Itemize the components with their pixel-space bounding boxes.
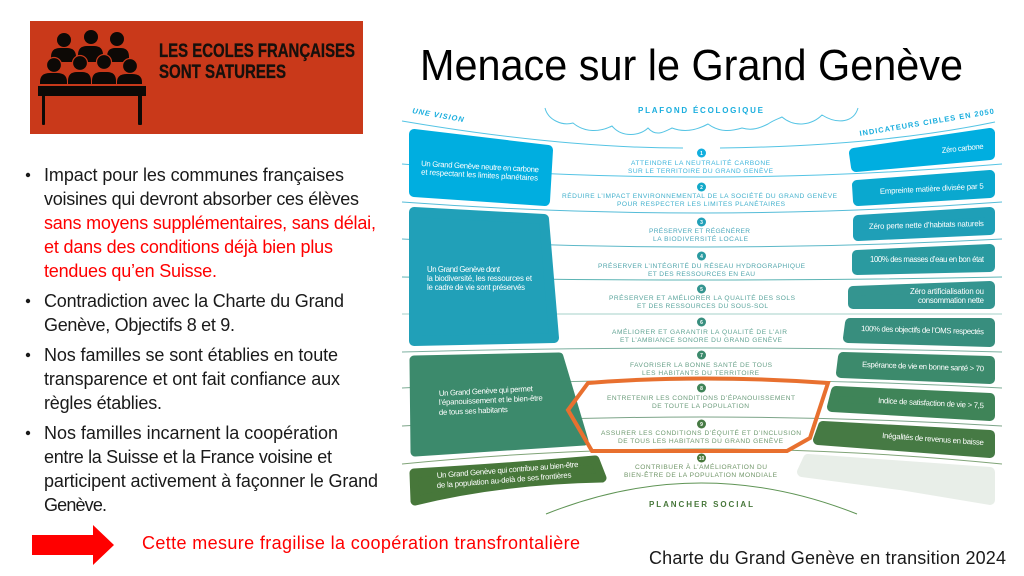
objective 5: 5 (700, 287, 703, 293)
objective 10: CONTRIBUER À L’AMÉLIORATION DU (635, 462, 767, 471)
indicator: zéro carbone (854, 133, 990, 167)
vision panel: biodiversité: le cadre de vie sont préservés (427, 283, 525, 292)
bullet 2: contradiction (44, 291, 344, 335)
indicator: masses d'eau: 100% des masses d’eau en bon état (870, 255, 985, 264)
vision panel: neutre en carbone (414, 134, 548, 201)
bullet 1: impact: Impact pour les communes françaises (44, 165, 344, 185)
indicator: zéro carbone: Zéro carbone (941, 142, 984, 155)
bullet 1: impact (44, 165, 376, 281)
indicator: masses d'eau (857, 249, 990, 270)
objective 5 (609, 284, 796, 310)
banner: les écoles françaises (30, 21, 363, 134)
indicator: inégalités (818, 426, 990, 453)
banner heading: SONT SATUREES (159, 62, 286, 83)
callout: conclusion: Cette mesure fragilise la coopération transfrontalière (142, 533, 580, 553)
objective 1 (628, 148, 774, 175)
objective 8: DE TOUTE LA POPULATION (652, 403, 749, 410)
icon: crowded school desk (38, 30, 146, 125)
vision panel: au-delà des frontières (414, 460, 602, 501)
objective 10: BIEN-ÊTRE DE LA POPULATION MONDIALE (624, 470, 778, 479)
bullet 4: coopération (44, 423, 378, 515)
objective 7 (630, 350, 773, 377)
vision panel: épanouissement: l’épanouissement et le bien-être (439, 393, 543, 407)
vision panel: épanouissement: Un Grand Genève qui permet (439, 384, 534, 398)
indicator: espérance de vie: Espérance de vie en bonne santé > 70 (862, 360, 985, 373)
bullet 4: coopération: Nos familles incarnent la coopération (44, 423, 338, 443)
objective 9: DE TOUS LES HABITANTS DU GRAND GENÈVE (618, 436, 784, 445)
indicator: satisfaction de vie (832, 391, 990, 416)
bullet 1: impact: tendues qu’en Suisse. (44, 261, 217, 281)
title: Menace sur le Grand Genève (420, 42, 963, 90)
objective 4: PRÉSERVER L’INTÉGRITÉ DU RÉSEAU HYDROGRAPHIQUE (598, 261, 806, 270)
objectives list (562, 148, 838, 479)
objective 2: 2 (700, 185, 703, 191)
vision panel: neutre en carbone: Un Grand Genève neutre en carbone (421, 159, 539, 174)
vision panel: au-delà des frontières: Un Grand Genève qui contribue au bien-être (436, 460, 579, 480)
bullet 3: familles établies: Nos familles se sont établies en toute (44, 345, 338, 365)
banner heading (159, 41, 355, 83)
objective 9: ASSURER LES CONDITIONS D’ÉQUITÉ ET D’INCLUSION (601, 428, 801, 437)
indicator: satisfaction de vie: Indice de satisfaction de vie > 7,5 (878, 396, 985, 410)
objective 1: 1 (700, 151, 703, 157)
bullet 4: coopération: participent activement à façonner le Grand (44, 471, 378, 491)
arrow: red (32, 525, 114, 565)
vision panel: au-delà des frontières: de la population au-delà de ses frontières (436, 470, 572, 490)
bullet 3: familles établies (44, 345, 340, 413)
indicator: habitats naturels: Zéro perte nette d’habitats naturels (869, 219, 984, 231)
banner heading: LES ECOLES FRANÇAISES (159, 41, 355, 62)
objective 1: SUR LE TERRITOIRE DU GRAND GENÈVE (628, 166, 774, 175)
indicator: inégalités: Inégalités de revenus en baisse (882, 431, 984, 447)
objective 2 (562, 182, 838, 208)
objective 4 (598, 252, 806, 278)
objective 7: 7 (700, 353, 703, 359)
bullet 2: contradiction: Genève, Objectifs 8 et 9. (44, 315, 235, 335)
indicator: artificialisation: consommation nette (918, 296, 984, 305)
objective 10: 10 (699, 456, 704, 462)
objective 9: 9 (700, 422, 703, 428)
indicator: artificialisation (853, 286, 990, 305)
source caption: Charte du Grand Genève en transition 2024 (649, 548, 1006, 568)
bullet 3: familles établies: transparence et ont fait confiance aux (44, 369, 340, 389)
callout: orange highlight around objectives 8 and 9 (568, 378, 828, 451)
objective 4: 4 (700, 254, 703, 260)
bullet list: arguments (26, 165, 378, 515)
objective 2: RÉDUIRE L’IMPACT ENVIRONNEMENTAL DE LA SOCIÉTÉ DU GRAND GENÈVE (562, 191, 838, 200)
indicator: habitats naturels (858, 212, 990, 236)
indicator: OMS: 100% des objectifs de l’OMS respectés (861, 324, 984, 336)
vision panel: biodiversité: la biodiversité, les ressources et (427, 274, 533, 283)
objective 7: FAVORISER LA BONNE SANTÉ DE TOUS (630, 360, 773, 369)
heading: plafond écologique: PLAFOND ÉCOLOGIQUE (638, 106, 764, 115)
objective 6: ET L’AMBIANCE SONORE DU GRAND GENÈVE (620, 335, 783, 344)
objective 1: ATTEINDRE LA NEUTRALITÉ CARBONE (631, 158, 771, 167)
objective 5: ET DES RESSOURCES DU SOUS-SOL (637, 303, 768, 310)
bullet 1: impact: voisines qui devront absorber ces élèves (44, 189, 359, 209)
bullet 4: coopération: entre la Suisse et la France voisine et (44, 447, 332, 467)
objective 3: PRÉSERVER ET RÉGÉNÉRER (649, 226, 750, 235)
vision panel: épanouissement (414, 357, 584, 452)
vision panel: biodiversité: Un Grand Genève dont (427, 265, 501, 274)
vision panel: neutre en carbone: et respectant les limites planétaires (421, 168, 538, 183)
bullet 4: coopération: Genève. (44, 495, 107, 515)
bullet 2: contradiction: Contradiction avec la Charte du Grand (44, 291, 344, 311)
objective 6: 6 (700, 320, 703, 326)
objective 3: 3 (700, 220, 703, 226)
vision panel: épanouissement: de tous ses habitants (439, 405, 508, 417)
vision panel: biodiversité (414, 212, 554, 341)
objective 4: ET DES RESSOURCES EN EAU (648, 271, 755, 278)
objective 7: LES HABITANTS DU TERRITOIRE (642, 370, 760, 377)
chart: charte du Grand Genève (402, 106, 1002, 514)
objective 10 (624, 454, 778, 479)
objective 6: AMÉLIORER ET GARANTIR LA QUALITÉ DE L’AIR (612, 327, 787, 336)
objective 3: LA BIODIVERSITÉ LOCALE (653, 234, 749, 243)
bullet 1: impact: et dans des conditions déjà bien plus (44, 237, 333, 257)
heading: plancher social: PLANCHER SOCIAL (649, 500, 753, 509)
bullet 1: impact: sans moyens supplémentaires, sans délai, (44, 213, 376, 233)
objective 8: 8 (700, 386, 703, 392)
objective 3 (649, 218, 750, 243)
objective 9 (601, 420, 801, 445)
objective 8 (607, 384, 795, 410)
indicator: OMS (848, 323, 990, 342)
bullet 3: familles établies: règles établies. (44, 393, 162, 413)
heading: indicateurs cibles: INDICATEURS CIBLES EN 2050 (859, 107, 994, 138)
indicator: empreinte matière: Empreinte matière divisée par 5 (880, 182, 985, 196)
objective 2: POUR RESPECTER LES LIMITES PLANÉTAIRES (617, 199, 786, 208)
indicator: empty pale panel (802, 459, 990, 500)
objective 6 (612, 318, 787, 344)
indicator: artificialisation: Zéro artificialisation ou (910, 287, 984, 296)
indicator: empreinte matière (857, 175, 990, 201)
objective 8: ENTRETENIR LES CONDITIONS D’ÉPANOUISSEMENT (607, 393, 795, 402)
objective 5: PRÉSERVER ET AMÉLIORER LA QUALITÉ DES SOLS (609, 293, 796, 302)
indicator: espérance de vie (841, 357, 990, 379)
heading: une vision: UNE VISION (412, 106, 465, 124)
